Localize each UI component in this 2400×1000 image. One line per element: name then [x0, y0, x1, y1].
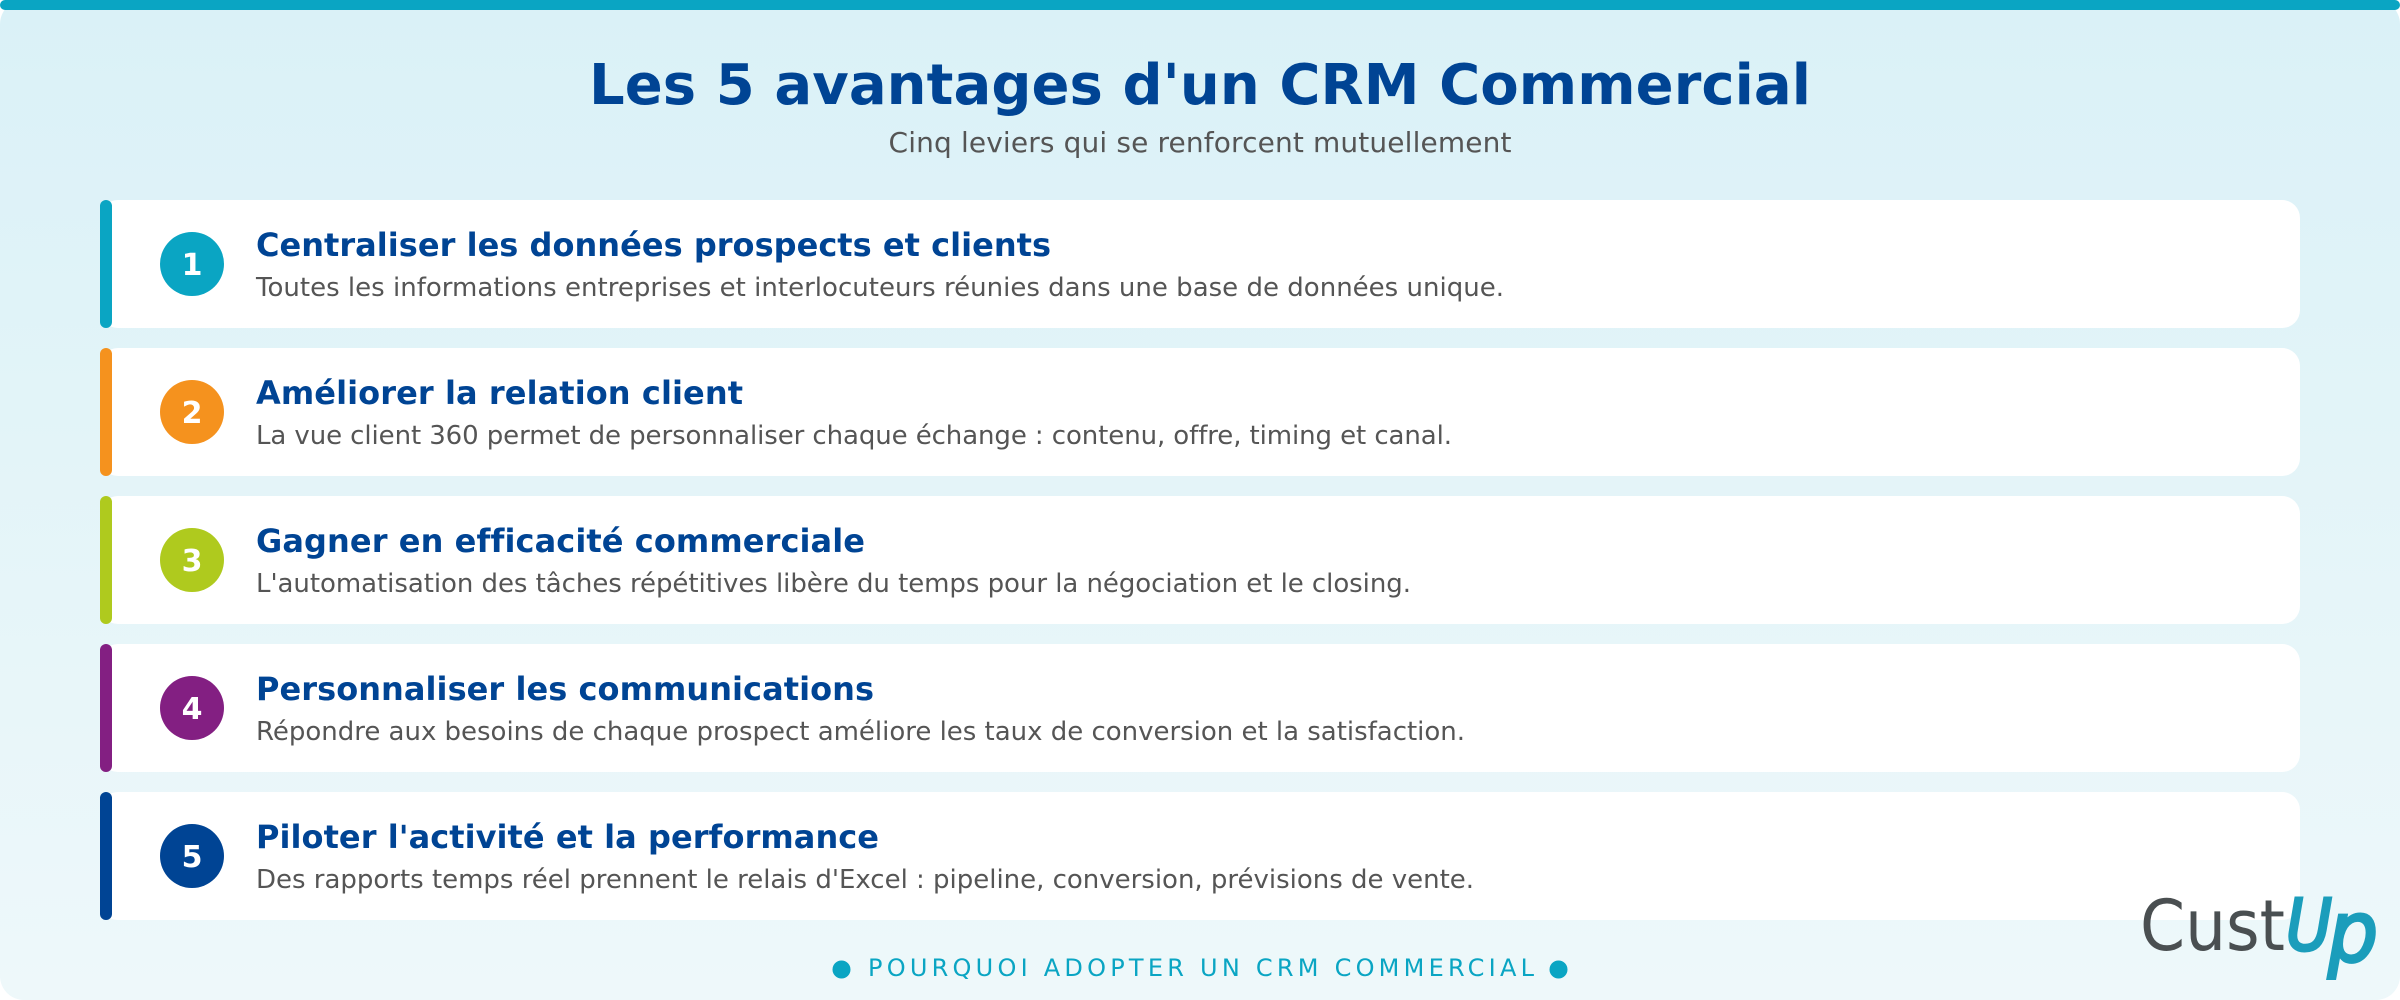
panel: benefit 4: Répondre aux besoins de chaque prospect améliore les taux de conversion et la satisfaction. — [256, 717, 1465, 747]
panel: benefit 4 — [100, 644, 2300, 772]
logo: CustUp: Cust — [2140, 885, 2285, 967]
subtitle: Cinq leviers qui se renforcent mutuellement — [888, 126, 1512, 159]
panel: benefit 1 — [100, 200, 2300, 328]
panel: benefit 2 — [100, 348, 2300, 476]
panel: benefit 1: Toutes les informations entreprises et interlocuteurs réunies dans une base de données unique. — [255, 273, 1504, 303]
panel: benefit 3: Gagner en efficacité commerciale — [256, 522, 865, 560]
footer tagline: POURQUOI ADOPTER UN CRM COMMERCIAL — [868, 954, 1535, 982]
panel: benefit 1: Centraliser les données prospects et clients — [256, 226, 1051, 264]
panel: benefit 4: Personnaliser les communications — [256, 670, 874, 708]
title: Les 5 avantages d'un CRM Commercial — [589, 53, 1811, 118]
panel: benefit 2: Améliorer la relation client — [256, 374, 743, 412]
panel: benefit 1: 1 — [182, 248, 202, 283]
logo: CustUp — [2140, 883, 2378, 981]
panel: benefit 3 — [100, 496, 2300, 624]
panel: benefit 2: 2 — [182, 396, 202, 431]
logo: CustUp: p — [2327, 883, 2378, 981]
logo: CustUp: U — [2286, 884, 2332, 967]
panel: benefit 5 — [100, 792, 2300, 920]
panel: benefit 3: L'automatisation des tâches répétitives libère du temps pour la négociation et le closing. — [256, 569, 1411, 599]
panel: benefit 5: Piloter l'activité et la performance — [256, 818, 879, 856]
top accent bar — [0, 0, 2400, 10]
panel: benefit 5: 5 — [182, 840, 202, 875]
panel: benefit 3: 3 — [182, 544, 202, 579]
panel: benefit 4: 4 — [182, 692, 202, 727]
panel: benefit 2: La vue client 360 permet de personnaliser chaque échange : contenu, offre, timing et canal. — [256, 421, 1452, 451]
panel: benefit 5: Des rapports temps réel prennent le relais d'Excel : pipeline, conversion, prévisions de vente. — [256, 865, 1474, 895]
